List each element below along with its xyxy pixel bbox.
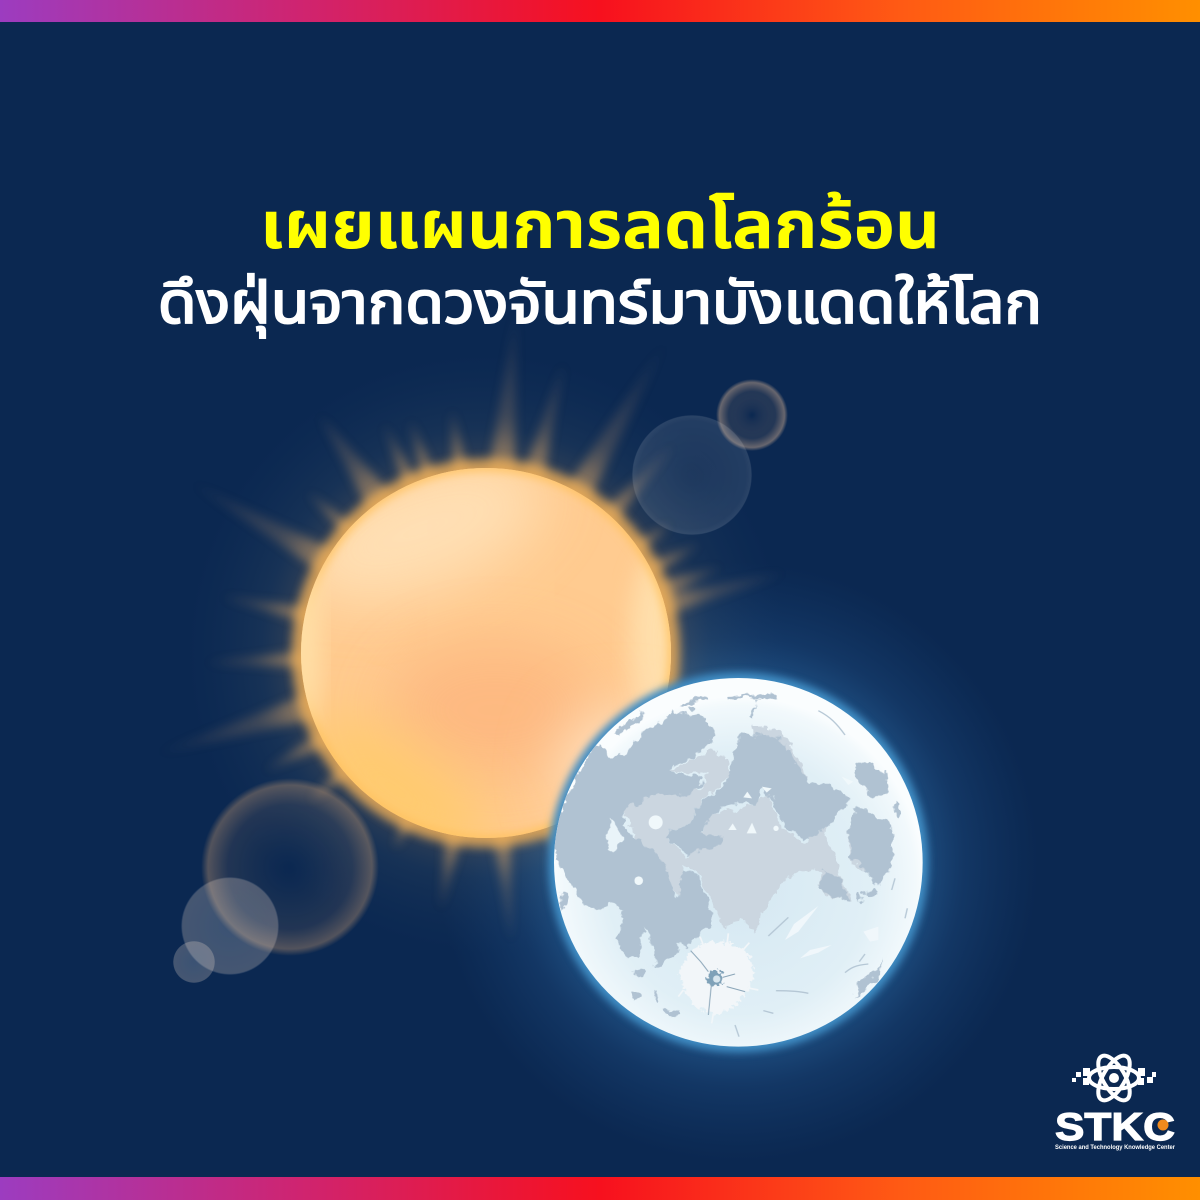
dark maria	[552, 693, 900, 1019]
moon rim glow	[548, 672, 928, 1052]
logo dot	[1158, 1120, 1168, 1130]
lens flare: lower medium	[181, 877, 279, 975]
top gradient bar	[0, 0, 1200, 22]
logo wordmark: STKC	[1055, 1106, 1175, 1149]
logo atom icon	[1089, 1051, 1139, 1105]
lens flare: lower small	[173, 941, 215, 983]
sun rays	[152, 301, 788, 943]
sun	[194, 346, 762, 926]
thin marks	[735, 711, 907, 1037]
sun halo	[292, 459, 680, 847]
lens flare: lower large	[201, 778, 379, 956]
crater ejecta	[679, 942, 754, 1015]
moon outer glow	[438, 562, 1038, 1162]
moon disc	[554, 678, 923, 1047]
bright spots	[607, 817, 623, 852]
sun haze	[186, 353, 786, 953]
lens flare: upper small	[716, 379, 788, 451]
moon	[548, 672, 928, 1052]
crater rays	[678, 933, 758, 1023]
logo pixels	[1072, 1068, 1156, 1085]
logo tagline: Science and Technology Knowledge Center	[1055, 1145, 1176, 1151]
sun disc	[301, 468, 671, 838]
bottom gradient bar	[0, 1177, 1200, 1200]
title: เผยแผนการลดโลกร้อน	[260, 188, 940, 263]
subtitle: ดึงฝุ่นจากดวงจันทร์มาบังแดดให้โลก	[158, 271, 1042, 338]
light maria	[624, 724, 866, 934]
lens flare: upper large	[632, 415, 752, 535]
logo: STKC	[1055, 1051, 1176, 1151]
sun shading	[301, 468, 671, 838]
crater	[691, 951, 745, 1015]
logo atom core	[1109, 1073, 1119, 1083]
streaks	[785, 906, 878, 958]
